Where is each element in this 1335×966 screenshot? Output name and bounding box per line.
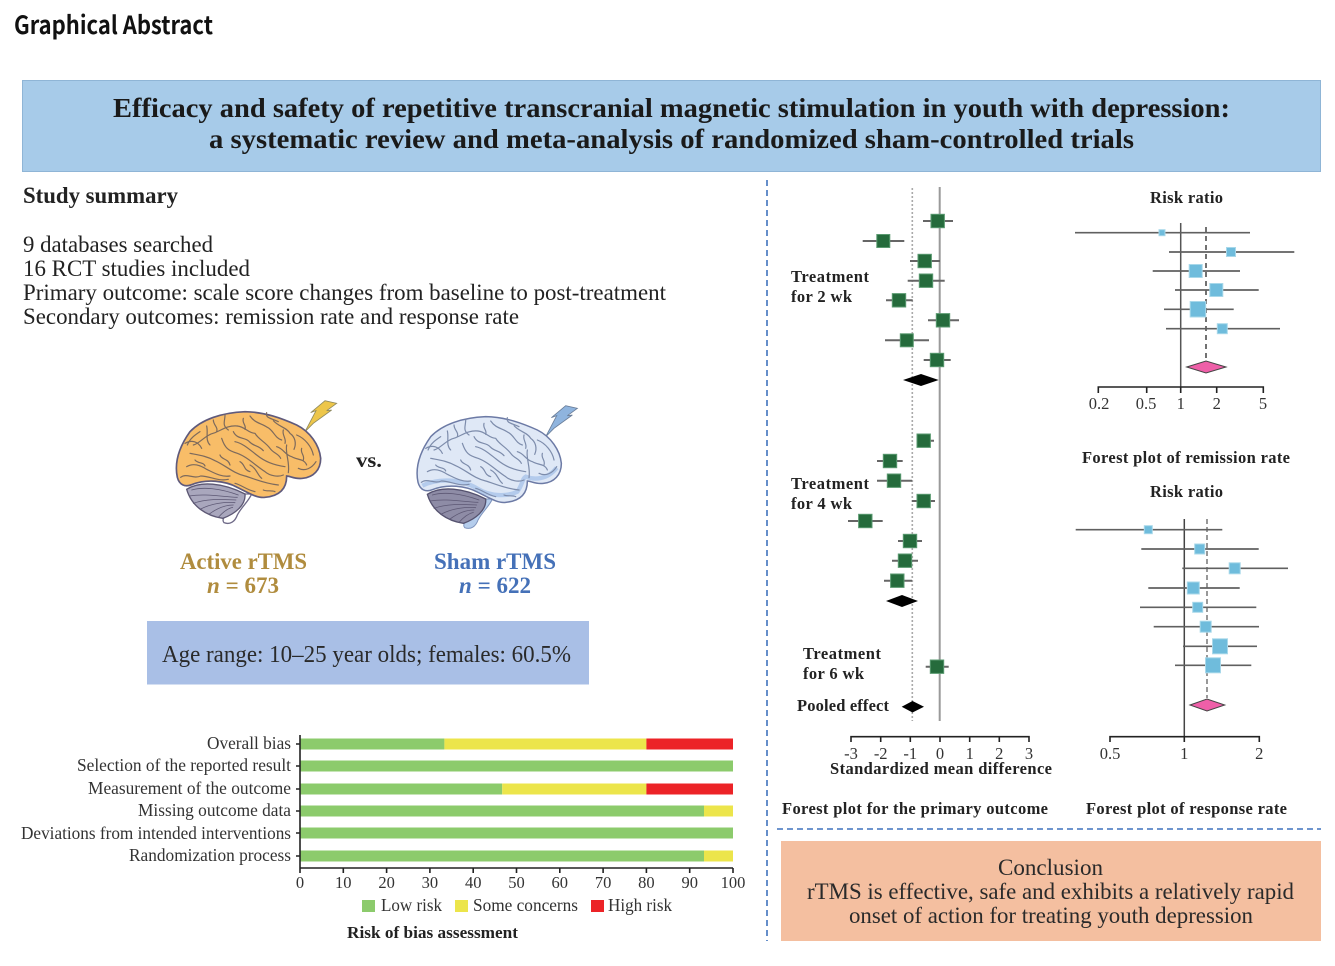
- chart: forest plot response rate: [1076, 482, 1288, 818]
- title banner: [22, 80, 1320, 172]
- study summary list: 9 databases searched: [23, 232, 213, 257]
- response caption: Forest plot of response rate: [1086, 799, 1287, 818]
- bias axis labels: 90: [681, 873, 698, 892]
- primary axis: 2: [995, 744, 1003, 763]
- title line 1: Efficacy and safety of repetitive transcranial magnetic stimulation in youth with depression:: [113, 93, 1230, 123]
- treatment duration labels: for 6 wk: [803, 664, 865, 683]
- bias axes: [296, 735, 733, 873]
- response axis: [1100, 737, 1263, 763]
- response axis: 2: [1255, 744, 1263, 763]
- remission studies: [1075, 230, 1294, 334]
- study summary list: 16 RCT studies included: [23, 256, 250, 281]
- bias axis labels: 70: [595, 873, 611, 892]
- bias legend: High risk: [608, 895, 672, 915]
- treatment duration labels: for 2 wk: [791, 287, 853, 306]
- remission reference lines: [1181, 223, 1206, 387]
- response studies: [1076, 526, 1288, 673]
- bias axis labels: 20: [378, 873, 395, 892]
- remission axis: 1: [1177, 394, 1185, 413]
- remission caption: Forest plot of remission rate: [1082, 448, 1290, 467]
- remission axis: 0.5: [1136, 394, 1156, 413]
- bias axis labels: 30: [422, 873, 438, 892]
- panel: study summary: [23, 183, 667, 329]
- bias legend: Low risk: [381, 895, 442, 915]
- remission axis: 0.2: [1089, 394, 1109, 413]
- vertical divider: [766, 180, 768, 941]
- primary axis: -1: [903, 744, 917, 763]
- chart: forest plot remission rate: [1075, 188, 1294, 467]
- pooled diamonds: [886, 374, 939, 712]
- bias bars: [300, 738, 733, 862]
- primary plot caption: Forest plot for the primary outcome: [782, 799, 1048, 818]
- primary axis: 3: [1025, 744, 1033, 763]
- bias axis labels: 50: [508, 873, 525, 892]
- panel: conclusion: Conclusion: [998, 855, 1104, 880]
- label: sham rTMS group: [434, 549, 556, 598]
- callout: age and sex: [147, 621, 589, 684]
- bias legend: [362, 895, 672, 915]
- treatment duration labels: Treatment: [791, 474, 870, 493]
- bias domain labels: Deviations from intended interventions: [21, 823, 291, 843]
- bias axis labels: 80: [638, 873, 655, 892]
- bias domain labels: Missing outcome data: [138, 800, 291, 820]
- bias axis labels: 10: [335, 873, 352, 892]
- treatment duration labels: for 4 wk: [791, 494, 853, 513]
- remission heading: Risk ratio: [1150, 188, 1223, 207]
- bias domain labels: [21, 733, 291, 865]
- remission axis: 2: [1213, 394, 1221, 413]
- horizontal divider: [777, 828, 1321, 830]
- response heading: Risk ratio: [1150, 482, 1223, 501]
- label: sham rTMS group: Sham rTMS: [434, 549, 556, 574]
- label: active rTMS group: n = 673: [207, 573, 279, 598]
- response pooled diamond: [1190, 699, 1225, 711]
- remission axis: [1089, 387, 1267, 413]
- icon: active rTMS brain: [176, 401, 337, 523]
- vs label: vs.: [356, 450, 382, 472]
- primary axis: -3: [844, 744, 858, 763]
- bias legend: Some concerns: [473, 895, 578, 915]
- treatment duration labels: [791, 267, 890, 715]
- bias axis labels: 60: [552, 873, 568, 892]
- panel: conclusion: rTMS is effective, safe and exhibits a relatively rapid: [807, 879, 1294, 904]
- bias caption: Risk of bias assessment: [347, 923, 519, 942]
- primary axis: [844, 737, 1033, 763]
- bias domain labels: Overall bias: [207, 733, 291, 753]
- title line 2: a systematic review and meta-analysis of randomized sham-controlled trials: [209, 124, 1134, 154]
- primary axis: 0: [936, 744, 944, 763]
- response reference lines: [1184, 519, 1207, 737]
- bias domain labels: Measurement of the outcome: [88, 778, 291, 798]
- study summary heading: Study summary: [23, 183, 178, 208]
- bias axis labels: 40: [465, 873, 481, 892]
- treatment duration labels: Treatment: [803, 644, 882, 663]
- chart: risk of bias assessment: [21, 733, 745, 942]
- treatment duration labels: Pooled effect: [797, 696, 890, 715]
- chart: forest plot primary outcome: [782, 187, 1052, 818]
- remission axis: 5: [1259, 394, 1267, 413]
- study summary list: [23, 232, 667, 329]
- bias axis labels: 0: [296, 873, 304, 892]
- study summary list: Secondary outcomes: remission rate and response rate: [23, 304, 519, 329]
- page heading: Graphical Abstract: [14, 6, 213, 42]
- null and pooled reference lines: [912, 187, 940, 721]
- response axis: 0.5: [1100, 744, 1120, 763]
- bias axis labels: [296, 873, 745, 892]
- label: sham rTMS group: n = 622: [459, 573, 531, 598]
- primary axis: 1: [966, 744, 974, 763]
- panel: conclusion: onset of action for treating youth depression: [849, 903, 1253, 928]
- callout: age and sex: Age range: 10–25 year olds; females: 60.5%: [162, 642, 571, 668]
- remission pooled diamond: [1187, 361, 1226, 373]
- icon: sham rTMS brain: [417, 406, 577, 528]
- response axis: 1: [1180, 744, 1188, 763]
- label: active rTMS group: Active rTMS: [180, 549, 307, 574]
- bias axis labels: 100: [721, 873, 745, 892]
- treatment duration labels: Treatment: [791, 267, 870, 286]
- primary axis: -2: [874, 744, 888, 763]
- bias domain labels: Randomization process: [129, 845, 291, 865]
- study estimates: [848, 214, 959, 673]
- study summary list: Primary outcome: scale score changes from baseline to post-treatment: [23, 280, 667, 305]
- primary axis title: Standardized mean difference: [830, 759, 1052, 778]
- panel: conclusion: [781, 841, 1321, 941]
- bias domain labels: Selection of the reported result: [77, 755, 291, 775]
- label: active rTMS group: [180, 549, 307, 598]
